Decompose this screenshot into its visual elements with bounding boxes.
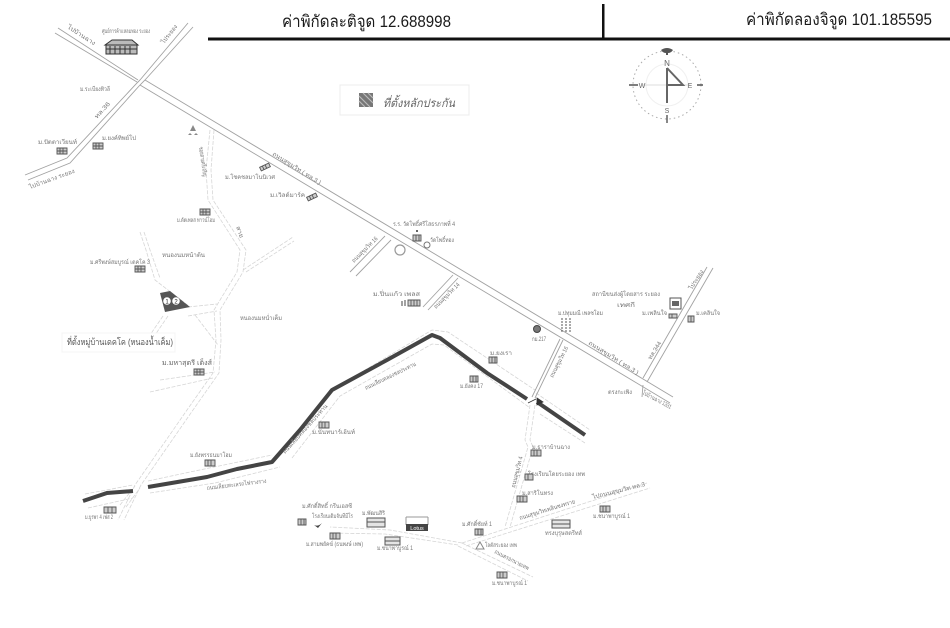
- road labels: ถนนสุขุมวิท 4: [510, 455, 525, 488]
- place labels: northwest: ม.ปัตตาเวียนท์: [38, 138, 77, 146]
- plot: project location: [160, 291, 190, 312]
- header: coordinates bar: [208, 4, 950, 40]
- road labels: ซอยสายศรีเจริญ: [197, 146, 209, 177]
- place labels: northwest: ม.มหาสุตรี เต็งส์: [162, 358, 213, 367]
- landmark: shopping centre: ศูนย์การค้าแหลมทอง ระยอง: [102, 27, 150, 35]
- icon: compass: E: [688, 83, 693, 90]
- highlighted route: [83, 335, 585, 501]
- icon: compass: [629, 48, 703, 123]
- place labels: south: โรงเรียนโดยระยอง เทพ: [528, 470, 585, 478]
- road labels: ไปบ้านฉาง 1331: [640, 388, 673, 411]
- place labels: south: ม.ชนาพาบูรณ์ 1: [593, 512, 631, 520]
- road labels: สาย: [234, 225, 245, 239]
- place labels: south: ม.สาริโนทรง: [522, 489, 553, 497]
- road labels: ถนนสุขุมวิทเพลินชงทราย: [519, 498, 576, 522]
- place icons: northwest: [57, 125, 317, 375]
- road labels: ถนนเลียบคลองชลประทาน: [281, 402, 329, 455]
- road labels: ถนนสุขุมวิท 16: [350, 235, 380, 264]
- legend swatch: [359, 93, 373, 107]
- place labels: centre: ม.ปิ่นแก้ว เพลส: [373, 290, 420, 298]
- place labels: centre: ม.เคลินใจ: [696, 309, 720, 317]
- place labels: northwest: ม.โชคชลมาโนนิเวศ: [225, 173, 275, 181]
- place labels: centre: เทศกี: [617, 301, 635, 309]
- plot: project location: 2: [174, 300, 178, 306]
- place labels: south: ทรงบุรุษสตรีทส์: [545, 529, 582, 537]
- place labels: centre: ตรงกะเพิง: [608, 389, 632, 396]
- place labels: centre: [373, 219, 720, 396]
- road labels: ทล.36: [94, 101, 112, 120]
- road labels: ไปบ้านฉาง ระยอง: [27, 167, 76, 191]
- place labels: northwest: หนองนมหน้าต้น: [162, 252, 205, 259]
- icon: compass: N: [664, 59, 670, 68]
- road labels: ไประยอง: [159, 23, 179, 46]
- place labels: centre: ร.ร. วัดโพธิ์ศรีโสธรภาพที่ 4: [393, 219, 456, 228]
- place labels: south: ม.สามพยัคฆ์ (ธนพงษ์ เทพ): [306, 540, 363, 548]
- legend box: [340, 85, 469, 115]
- road labels: ถนนเลียบคลองชลประทาน: [363, 360, 417, 392]
- place labels: south: ม.ศักดิ์ชัยท์ 1: [462, 519, 493, 528]
- place labels: northwest: หนองนมหน่ำเค็ม: [240, 313, 282, 322]
- place labels: northwest: ม.ดัดเพลส ทาวน์โฮม: [177, 216, 215, 224]
- place labels: centre: วัดโพธิ์ทอง: [430, 235, 454, 244]
- place labels: centre: ม.ยังคง 17: [460, 383, 484, 390]
- place labels: northwest: ม.เวิลด์มาร์ค: [270, 191, 305, 199]
- road labels: ทล.344: [648, 340, 664, 361]
- road labels: ถนนสุขุมวิท ( ทล.3 ): [271, 151, 322, 186]
- landmark: shopping centre: [102, 27, 150, 54]
- place labels: south: ม.ชนาพาบูรณ์ 1: [377, 544, 414, 552]
- place labels: centre: ม.ยงเรา: [490, 350, 512, 357]
- icon: Lotus store sign: Lotus: [410, 526, 424, 532]
- place labels: south: โลตัสระยอง เทพ: [485, 541, 517, 549]
- place labels: south: ม.ยังพรรธนมาโฮม: [190, 451, 232, 459]
- place labels: south: โรงเรียนเดิมจันทีมีโร: [312, 512, 354, 520]
- place labels: centre: ม.เพลินใจ: [642, 309, 667, 317]
- roads: secondary dashed roads: [85, 130, 650, 581]
- place labels: south: ม.ธาราบ้านฉาง: [532, 444, 570, 451]
- road labels: ถนนสุขุมวิท ( ทล.3 ): [587, 340, 640, 376]
- legend text: ที่ตั้งหลักประกัน: [383, 94, 456, 110]
- place labels: northwest: [38, 85, 305, 367]
- icon: Lotus store sign: [406, 517, 428, 532]
- place labels: south: ม.ศักดิ์สิทธิ์ กรีนเอสซี: [302, 501, 352, 510]
- road labels: ถนนสุขุมวิท 16: [549, 345, 570, 379]
- place labels: northwest: ม.ระเบียงทิวลี: [80, 85, 110, 93]
- place labels: south: ม.บูรพา 4 เฟส 2: [85, 514, 113, 521]
- place labels: northwest: ม.ศรีพงษ์สมบูรณ์ เดคโค 3: [90, 258, 151, 266]
- road labels: ไประยอง: [686, 268, 705, 292]
- road labels: ถนนเลียบทะเลรถไฟรางราง: [206, 477, 267, 492]
- latitude text: ค่าพิกัดละติจูด 12.688998: [282, 13, 451, 32]
- place icons: centre: [395, 230, 694, 382]
- icon: compass: W: [639, 83, 646, 90]
- roads: main road and highways: [25, 23, 713, 403]
- road labels: [27, 22, 705, 572]
- place labels: centre: กม.217: [532, 337, 546, 343]
- road labels: ไปถนนสุขุมวิท ทล.3: [591, 480, 647, 501]
- callout: village location: [62, 333, 175, 352]
- longitude text: ค่าพิกัดลองจิจูด 101.185595: [746, 11, 932, 30]
- place icons: south: [104, 422, 610, 578]
- place labels: south: ม.พัฒนสิริ: [362, 510, 386, 517]
- callout: village location: ที่ตั้งหมู่บ้านเดคโค (หนองน้ำเค็ม): [67, 335, 173, 348]
- place labels: northwest: ม.ยงค์ทิพย์โป: [102, 134, 136, 142]
- place labels: south: [85, 428, 631, 587]
- place labels: centre: ม.ปทุมมณี เพลซโฮม: [558, 309, 603, 317]
- icon: compass: S: [665, 108, 670, 115]
- plot: project location: 1: [165, 300, 169, 306]
- place labels: south: ม.ชนาพาบูรณ์ 1: [492, 579, 528, 587]
- place labels: south: ม.นันทนาร์เฮ้นท์: [312, 428, 355, 436]
- place labels: centre: สถานีขนส่งผู้โดยสาร ระยอง: [592, 290, 660, 298]
- road labels: ถนนสุขุมวิท 14: [432, 281, 462, 310]
- road labels: ไปบ้านฉาง: [65, 22, 97, 47]
- road labels: ถนนตรอกนายเทพ: [493, 549, 530, 572]
